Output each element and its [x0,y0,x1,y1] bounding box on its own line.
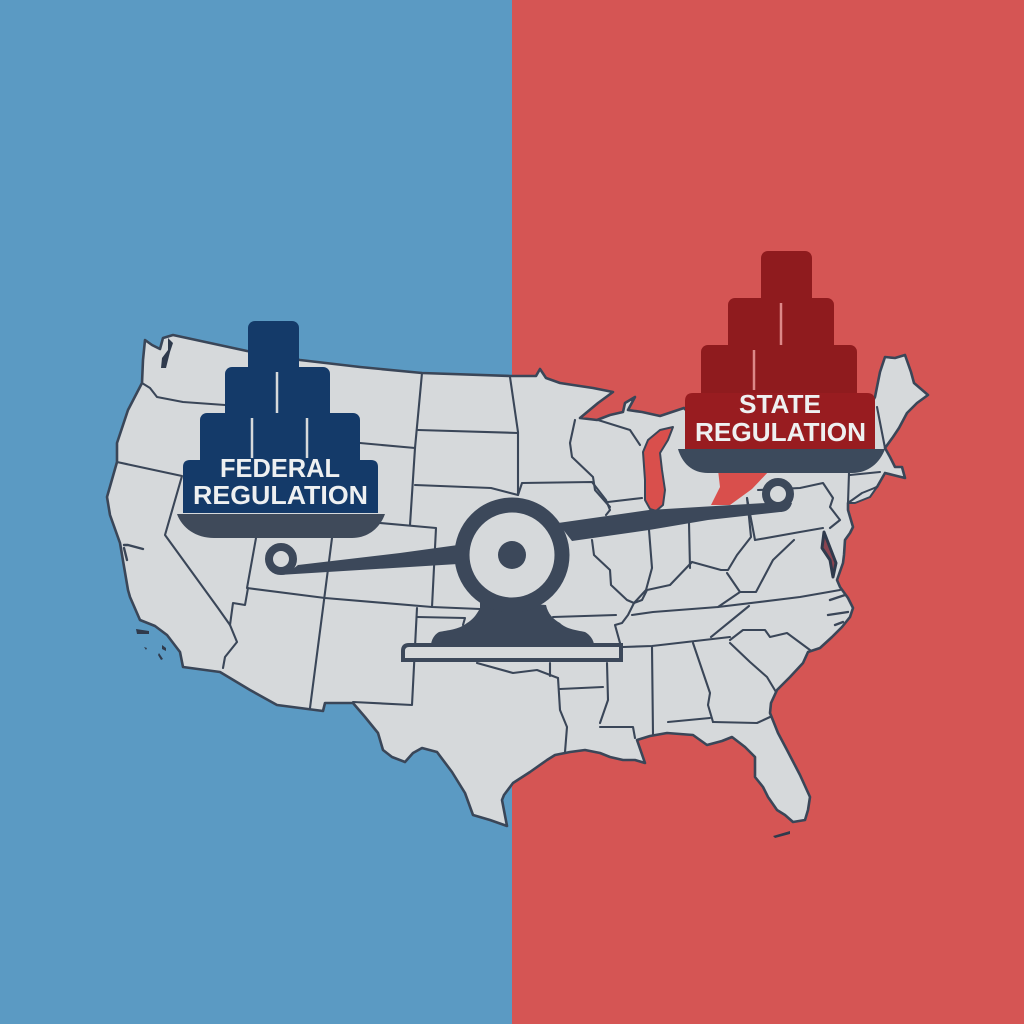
stack: state regulation blocks and pan [678,251,885,473]
scale pivot centre [498,541,526,569]
Channel Islands [136,629,166,660]
panel: blue federal side background [0,0,512,1024]
label line: STATE: STATE [739,389,821,419]
state label [695,389,866,447]
state blocks [685,251,875,449]
panel: red state side background [512,0,1024,1024]
balance scale [269,482,792,660]
state borders [117,373,885,752]
federal pan [177,514,385,538]
label line: REGULATION: REGULATION [193,480,368,510]
Great Lake: Lake Erie [711,470,770,505]
left beam ring [269,547,293,571]
Puget Sound [161,338,173,368]
map: contiguous United States [107,335,928,838]
stack: federal regulation blocks and pan [177,321,385,538]
map outline [107,335,928,826]
scale pedestal [431,600,594,644]
federal block gaps [252,372,307,458]
state pan [678,449,885,473]
Chesapeake Bay [822,532,836,577]
scale beam [279,503,792,575]
Great Lake: Lake Michigan [643,427,673,511]
right beam ring [766,482,790,506]
label line: REGULATION: REGULATION [695,417,866,447]
federal label [193,453,368,510]
Pamlico Sound [828,595,848,625]
scale pivot hub [462,505,562,605]
federal blocks [183,321,378,513]
state block gaps [754,303,781,390]
San Francisco Bay [124,545,143,560]
Long Island [848,487,877,503]
scale base [403,645,621,660]
label line: FEDERAL: FEDERAL [220,453,340,483]
Florida Keys [773,831,790,838]
